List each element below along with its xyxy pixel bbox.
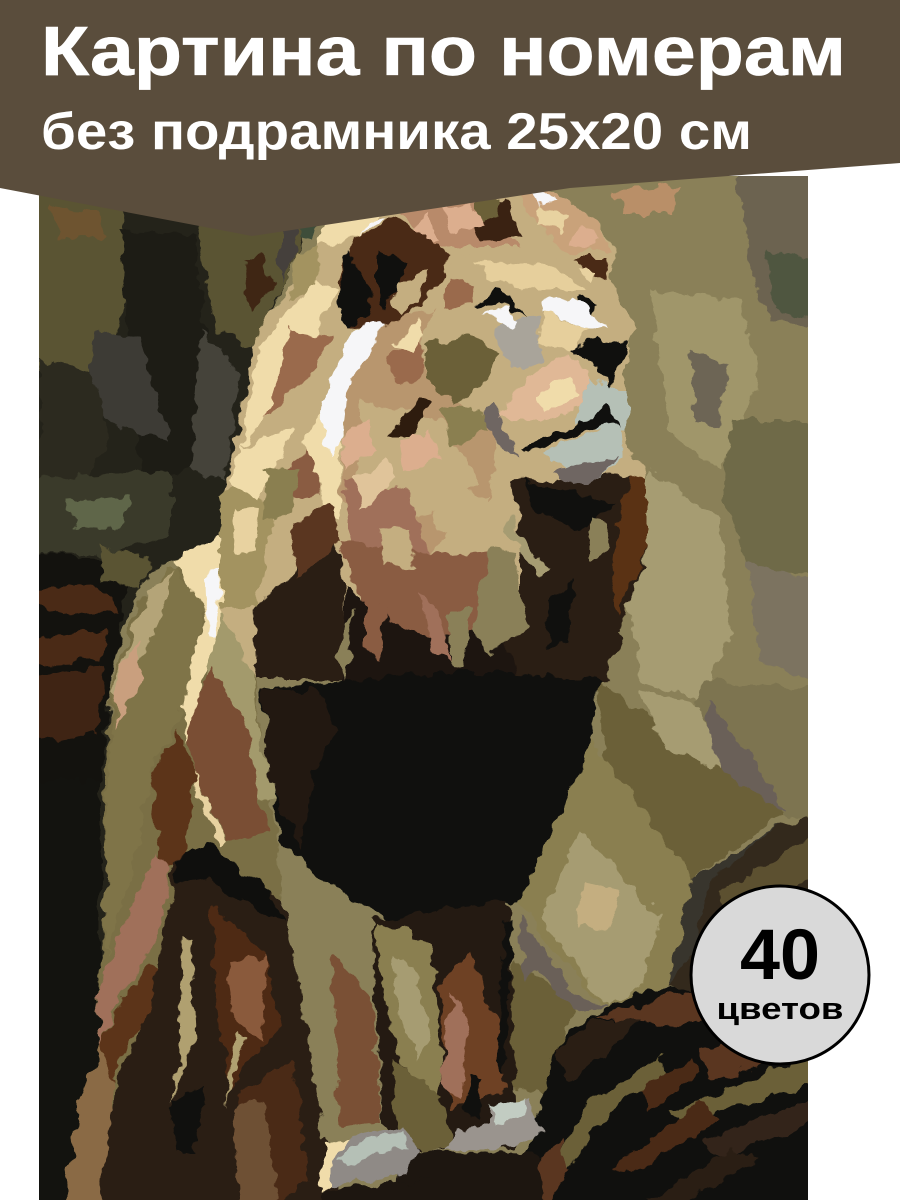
subtitle: без подрамника 25х20 см	[41, 103, 752, 161]
lion eyes	[473, 290, 597, 318]
painting background: rocks lower right	[525, 816, 808, 1200]
lion face	[423, 247, 637, 485]
header banner	[0, 0, 900, 236]
painting: lion	[20, 160, 830, 1200]
lion chest	[260, 672, 600, 925]
lion body and hind leg	[62, 533, 340, 1200]
badge: 40 colours	[691, 886, 869, 1064]
lion paws	[320, 1075, 545, 1200]
lion mouth	[522, 407, 620, 453]
white brow marks	[483, 297, 610, 330]
lion ear	[337, 217, 450, 327]
painting background: left dark forest	[39, 196, 317, 1200]
lion front legs	[279, 850, 515, 1152]
lion mane	[220, 190, 647, 700]
painting background: right olive	[503, 170, 830, 1097]
lion nose	[567, 340, 627, 388]
badge number: 40	[740, 916, 820, 995]
title: Картина по номерам	[41, 12, 846, 90]
badge label: цветов	[716, 991, 844, 1026]
mane mottling	[232, 203, 600, 570]
